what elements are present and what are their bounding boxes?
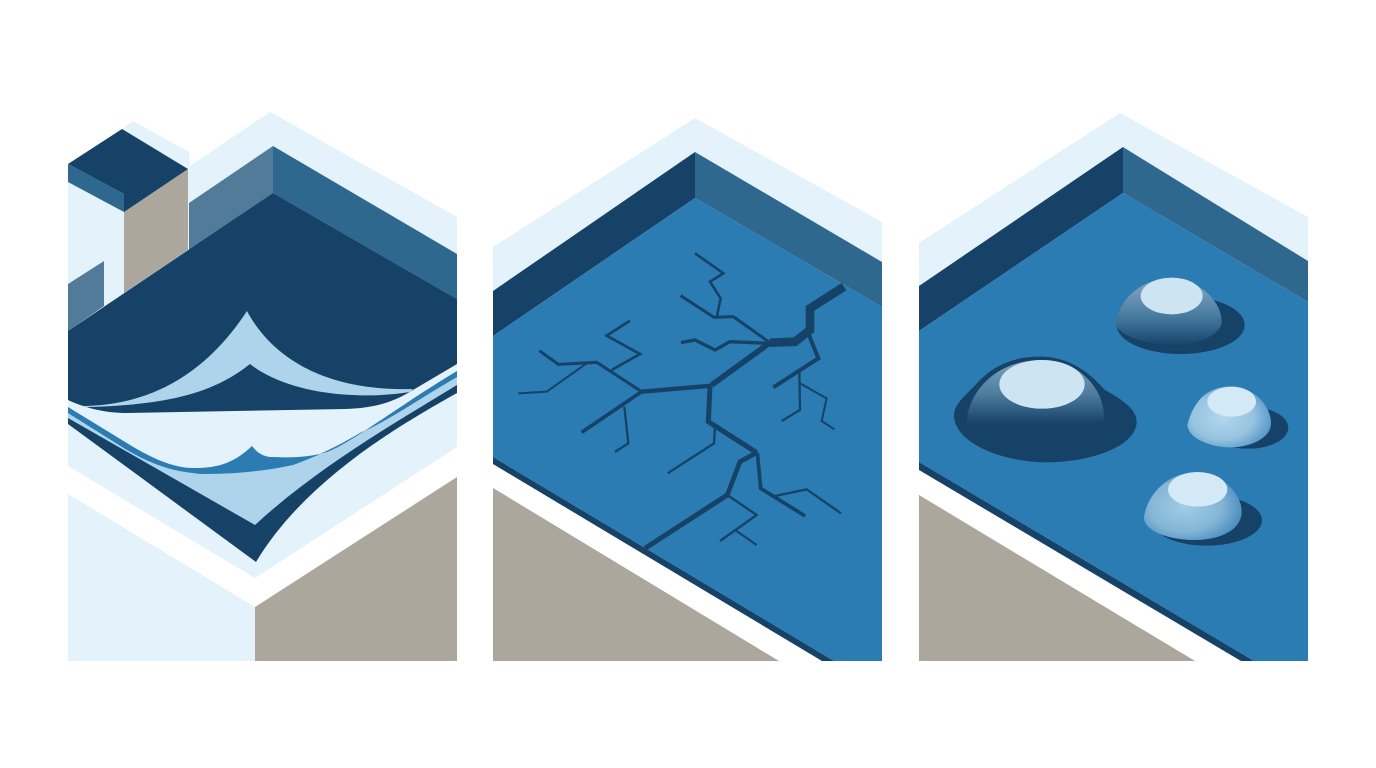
panel 3 light backdrop: [919, 113, 1308, 286]
dark lower edge: [919, 462, 1254, 661]
back wall, right face: [695, 152, 882, 307]
blue roof plane: [919, 193, 1308, 661]
back wall, left face: [189, 146, 273, 250]
lower-right tan block: [255, 477, 457, 661]
lower-left light block: [68, 494, 255, 661]
small wall stub: [68, 261, 104, 331]
back wall, left face: [493, 152, 695, 336]
blister: upper right: [1116, 278, 1245, 354]
light wave crest: [83, 311, 413, 407]
blister: lower right: [1144, 472, 1262, 546]
panel 2 light backdrop: [493, 118, 882, 291]
lower tan block: [493, 488, 779, 661]
dark roof plane: [68, 193, 457, 413]
blue roof plane: [493, 198, 882, 661]
panel: right, blistered membrane: [919, 113, 1308, 661]
panel: middle, cracked membrane: [493, 118, 882, 661]
back wall, right face: [273, 146, 457, 299]
lower tan block: [919, 495, 1195, 661]
small chimney block: [68, 129, 188, 293]
panel: left, wave-shaped membrane lifting: [68, 112, 457, 661]
pale blue fold: [68, 377, 457, 525]
dark lower edge: [493, 457, 834, 661]
blister: middle right: [1187, 387, 1288, 449]
blister: large dark: [954, 357, 1137, 462]
panel 1 light backdrop: [68, 112, 457, 578]
blisters: [954, 278, 1288, 546]
lower dark fold: [68, 377, 457, 562]
blue wave strip: [68, 371, 457, 474]
crack network: [518, 253, 844, 548]
back wall, left face: [919, 147, 1123, 331]
back wall, right face: [1123, 147, 1308, 302]
